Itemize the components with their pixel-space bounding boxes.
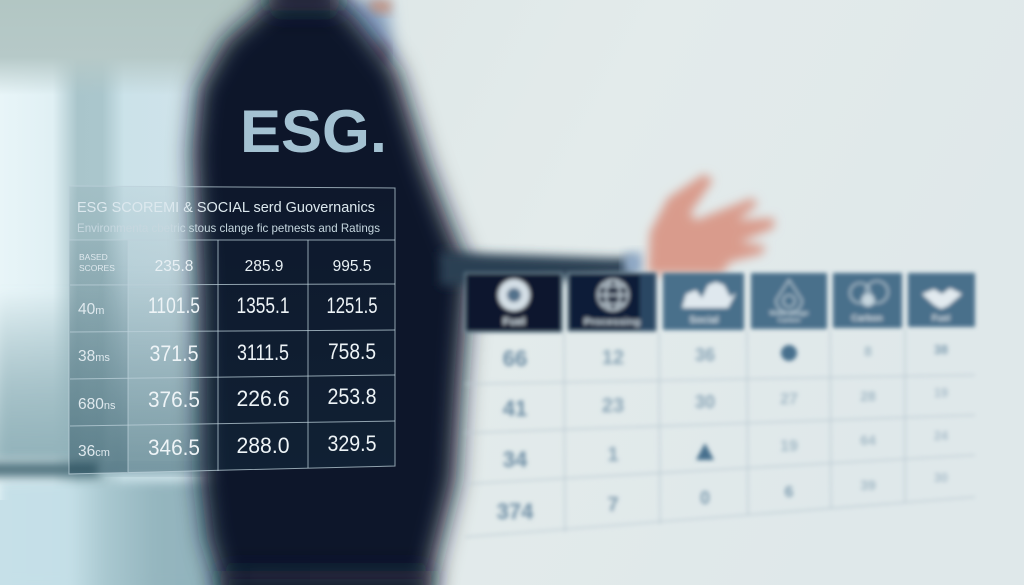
data values column 1: 41 — [503, 396, 527, 421]
header cell: drop — [751, 273, 827, 329]
data values column 2: 1 — [607, 444, 619, 466]
data values column 6: 24 — [934, 429, 948, 443]
header cell: rings — [833, 273, 902, 328]
row labels — [78, 301, 116, 460]
data values column 3: 30 — [695, 392, 715, 412]
row 2 values — [148, 293, 378, 318]
data values column 3 — [695, 345, 715, 508]
row 1 values: 995.5 — [333, 258, 371, 275]
header cell: handshake: Fuel — [932, 313, 950, 323]
data values column 1 — [497, 346, 534, 524]
data values column 5: 28 — [860, 388, 876, 404]
row 5 values: 288.0 — [236, 433, 290, 458]
row 2 values: 1251.5 — [326, 293, 378, 318]
row labels: 40m — [78, 301, 104, 318]
header cell: drop: Carbon — [778, 317, 800, 324]
row 3 values: 758.5 — [328, 339, 376, 364]
header cell: dark 2: Processing — [584, 316, 640, 328]
row labels: 680ns — [78, 396, 116, 413]
data values column 2: 7 — [607, 494, 619, 516]
blurred presenter silhouette — [192, 0, 642, 585]
title: ESG.: ESG. — [240, 98, 387, 165]
row 5 values: 346.5 — [148, 435, 200, 460]
row labels: 36cm — [78, 443, 110, 460]
table heading: ESG SCOREMI & SOCIAL serd Guovernanics — [77, 199, 375, 216]
panel: ESG scores glass table — [69, 186, 395, 474]
header cell: handshake — [908, 273, 975, 327]
data values column 6: 38 — [934, 343, 948, 357]
row 2 values: 1101.5 — [148, 293, 200, 318]
table grid lines — [69, 186, 395, 474]
row 4 values: 376.5 — [148, 387, 200, 412]
header cell: rings: Carbon — [851, 313, 883, 323]
panel: blurred data table — [465, 273, 975, 537]
header cell: dark 1: Fuel — [503, 316, 525, 328]
row 3 values: 371.5 — [150, 341, 198, 366]
row 4 values — [148, 384, 376, 412]
row 5 values: 329.5 — [328, 431, 376, 456]
data values column 4: 19 — [780, 438, 798, 455]
table subheading: Environmenta cbetric stous clange fic petnests and Ratings — [77, 221, 380, 235]
data values column 5 — [860, 343, 876, 493]
row 3 values — [150, 339, 376, 366]
row label: header: BASED — [79, 252, 108, 262]
data values column 5: 39 — [860, 477, 876, 493]
row 1 values — [155, 258, 371, 275]
row 4 values: 253.8 — [328, 384, 376, 409]
row 1 values: 285.9 — [245, 258, 283, 275]
data values column 3: 36 — [695, 345, 715, 365]
icon: blurred open hand — [648, 174, 774, 274]
row 2 values: 1355.1 — [236, 293, 290, 318]
data values column 3: 0 — [700, 488, 710, 508]
header cell: dark 2 — [568, 273, 656, 331]
data values column 6 — [934, 343, 948, 485]
row label: header: SCORES — [79, 263, 115, 273]
row 4 values: 226.6 — [236, 386, 290, 411]
data values column 5: 8 — [864, 343, 872, 359]
data values column 6: 30 — [934, 471, 948, 485]
header cell: people — [663, 273, 744, 330]
row 5 values — [148, 431, 376, 460]
data values column 1: 66 — [503, 346, 527, 371]
table grid — [465, 328, 975, 537]
header cell: dark 1 — [465, 273, 562, 332]
data values column 2 — [602, 347, 624, 516]
data values column 4: 6 — [785, 484, 794, 501]
data values column 1: 34 — [503, 447, 528, 472]
row label: header — [79, 252, 115, 273]
header cell: people: Social — [689, 315, 719, 326]
data values column 4 — [780, 345, 798, 501]
row 1 values: 235.8 — [155, 258, 193, 275]
header cell: drop: Water Usage — [769, 310, 809, 317]
data values column 4: 27 — [780, 391, 798, 408]
data values column 2: 23 — [602, 395, 624, 417]
data values column 1: 374 — [497, 499, 534, 524]
row 3 values: 3111.5 — [237, 340, 289, 365]
data values column 5: 64 — [860, 432, 876, 448]
data values column 2: 12 — [602, 347, 624, 369]
row labels: 38ms — [78, 348, 110, 365]
data values column 6: 19 — [934, 386, 948, 400]
